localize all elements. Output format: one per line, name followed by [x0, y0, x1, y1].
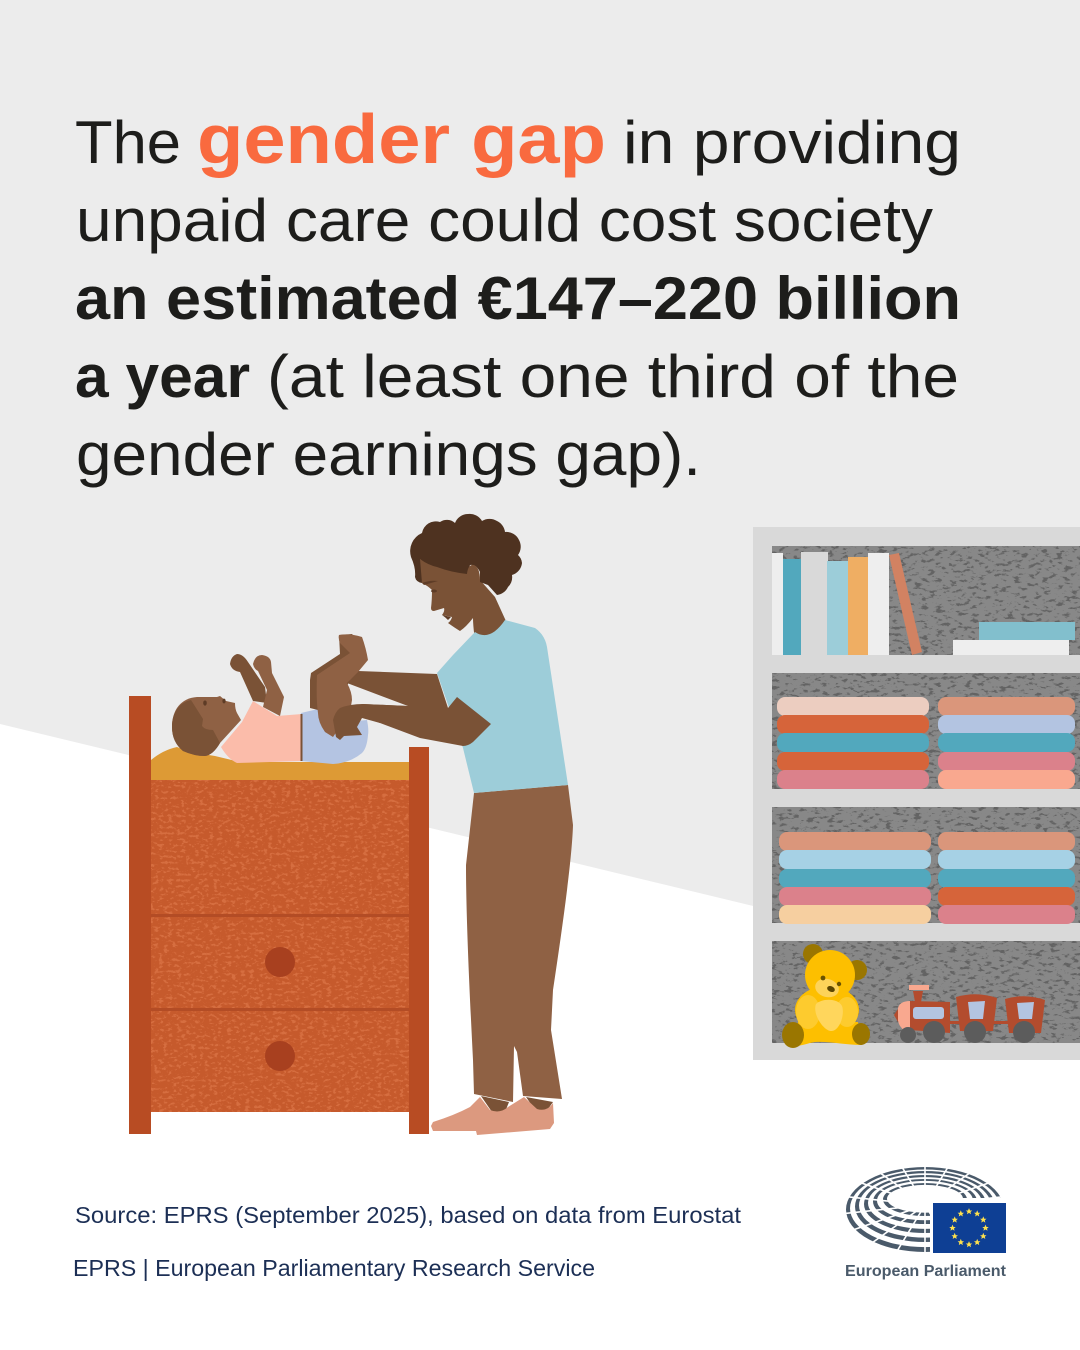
- caregiver hand: [333, 704, 408, 740]
- illustration: bookshelf: [753, 527, 1080, 1060]
- headline: unpaid care could cost society: [76, 187, 933, 254]
- t-shirt: [437, 620, 568, 793]
- source line: Source: EPRS (September 2025), based on data from Eurostat: [75, 1202, 741, 1228]
- baby head: [172, 696, 241, 756]
- baby hair: [172, 700, 220, 756]
- face details: [422, 581, 451, 620]
- attribution line: EPRS | European Parliamentary Research Service: [73, 1255, 595, 1281]
- table posts: [129, 696, 151, 1134]
- logo wordmark: European Parliament: [845, 1263, 1006, 1280]
- baby face details: [203, 699, 226, 706]
- drawers: [151, 780, 409, 1112]
- hair: [410, 514, 522, 595]
- headline: [75, 100, 961, 488]
- illustration: caregiver: [310, 514, 573, 1135]
- changing mat: [151, 747, 409, 780]
- illustration: changing table: [129, 696, 429, 1134]
- baby front arm: [253, 655, 284, 716]
- icon: teddy bear: [782, 944, 870, 1048]
- folded clothes, lower shelf: [779, 832, 1075, 924]
- books: [772, 552, 1075, 655]
- headline: an estimated €147–220 billion: [75, 265, 961, 332]
- baby raised leg, near: [317, 634, 368, 737]
- headline: gender gap: [197, 100, 606, 178]
- headline: gender earnings gap).: [76, 421, 701, 488]
- background grey diagonal panel: [0, 0, 1080, 985]
- caregiver arms: [340, 671, 491, 746]
- headline: a year: [75, 343, 250, 410]
- icon: toy train: [894, 985, 1045, 1043]
- baby back arm: [230, 654, 267, 703]
- baby body top: [221, 701, 302, 763]
- logo: European Parliament: [846, 1167, 1006, 1280]
- EU flag: [933, 1203, 1006, 1253]
- trousers: [466, 785, 573, 1102]
- baby raised leg, far: [310, 634, 365, 710]
- diaper: [301, 709, 368, 764]
- ear: [467, 565, 480, 580]
- headline: The: [75, 109, 181, 176]
- hemicycle: [846, 1167, 1001, 1252]
- headline: (at least one third of the: [267, 343, 959, 410]
- flag stars: [949, 1208, 989, 1247]
- shoes: [431, 1097, 554, 1135]
- ankles: [481, 1096, 553, 1114]
- folded clothes, upper shelf: [777, 697, 1075, 789]
- neck and face: [420, 559, 510, 640]
- shelf frame: [753, 527, 1080, 1060]
- shelf compartments: [772, 546, 1080, 1043]
- illustration: baby: [172, 654, 368, 764]
- headline: in providing: [623, 109, 961, 176]
